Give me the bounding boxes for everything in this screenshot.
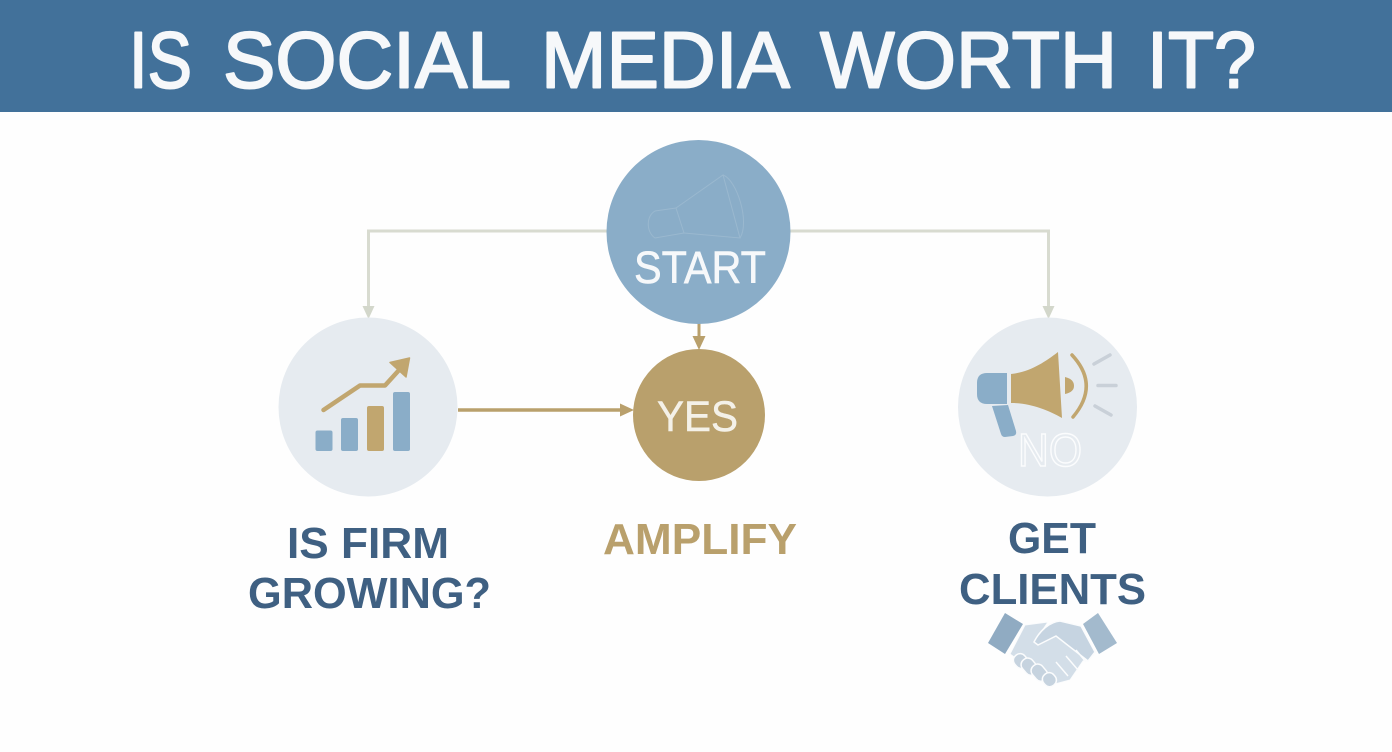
start node: [606, 140, 790, 324]
title banner: IS: [129, 16, 192, 104]
icon: bar chart with rising arrow: [316, 358, 410, 451]
icon: handshake: [988, 613, 1117, 689]
firm growing node: [278, 318, 458, 496]
title banner: WORTH: [820, 16, 1117, 104]
label: is firm growing: [248, 519, 491, 618]
yes node: YES: [657, 393, 738, 441]
no node: [958, 318, 1137, 496]
icon: megaphone: [977, 352, 1116, 437]
arrow: start to firm growing: [362, 231, 607, 319]
title banner: SOCIAL: [223, 16, 511, 104]
no node: NO: [1018, 424, 1082, 476]
label: get clients: [959, 514, 1146, 614]
label: is firm growing: IS FIRM: [287, 519, 449, 568]
label: get clients: GET: [1008, 514, 1096, 563]
arrow: start to get clients: [789, 231, 1054, 319]
label: is firm growing: GROWING?: [248, 569, 491, 618]
arrow: start to yes: [692, 322, 706, 350]
start node: START: [634, 242, 766, 293]
yes node: [633, 349, 765, 481]
arrow: firm growing to yes: [458, 404, 634, 416]
title banner: [0, 0, 1392, 112]
title banner: IT?: [1147, 16, 1256, 104]
title banner: MEDIA: [541, 16, 791, 104]
icon: faint megaphone: [648, 175, 744, 238]
label: amplify: AMPLIFY: [603, 515, 797, 564]
label: get clients: CLIENTS: [959, 565, 1146, 614]
